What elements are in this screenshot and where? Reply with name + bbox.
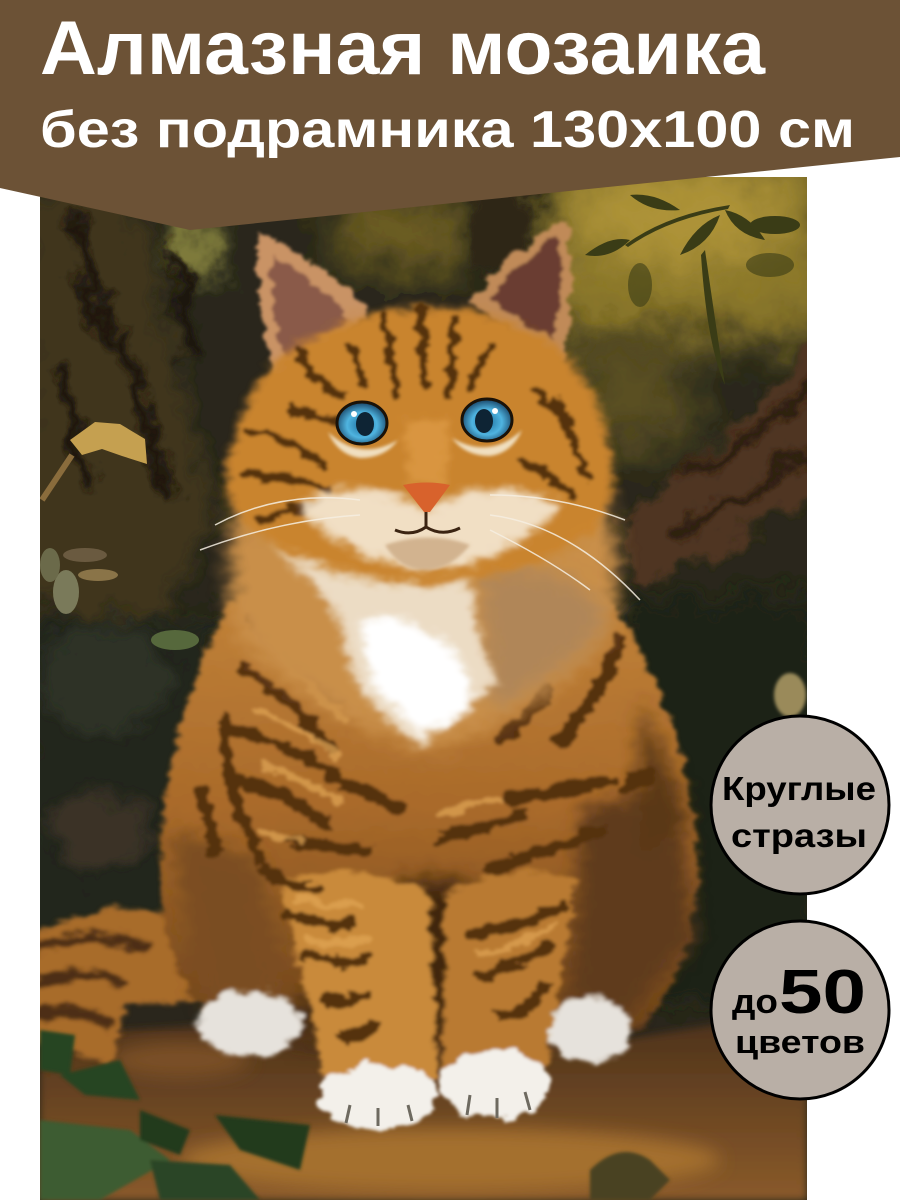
head [225,306,615,585]
chin [385,538,470,570]
ears [258,218,571,378]
cat body [156,594,704,1034]
leaves: upper right [585,195,800,385]
head stripes [245,310,590,520]
badge: up to 50 colours: 50 [779,958,866,1027]
banner [0,0,900,230]
body highlights [252,698,558,958]
banner title: Алмазная мозаика [40,6,766,91]
front paws [318,1050,551,1130]
badge: round rhinestones: стразы [731,817,867,854]
leaves: lower right [774,673,806,717]
face details [200,399,640,1126]
whiskers [200,495,640,600]
front legs [280,872,578,1080]
leaves: left [40,422,199,650]
badge: up to 50 colours: до [732,983,778,1021]
white chest [270,545,495,745]
mane [229,480,618,750]
muzzle [300,489,560,570]
banner subtitle: без подрамника 130х100 см [40,101,855,159]
badge: round rhinestones [711,716,889,894]
painting base colour [40,1100,807,1200]
foreground foliage [40,1030,670,1200]
badge: up to 50 colours [711,921,889,1099]
nose [403,482,450,512]
forest background [40,177,807,1002]
painting: ginger cat in the forest [40,177,807,1200]
forest floor [40,1010,807,1200]
bridge of the nose [405,420,450,485]
dark body shading [170,700,695,1060]
body stripes [200,620,650,1035]
back paws [198,991,632,1063]
ginger cat with fur texture [30,218,698,1130]
tail [30,908,210,1065]
badge: up to 50 colours: цветов [735,1024,865,1060]
eye: right [452,399,522,456]
eye: left [328,402,398,458]
badge: round rhinestones: Круглые [722,770,876,807]
claws [346,1092,530,1126]
